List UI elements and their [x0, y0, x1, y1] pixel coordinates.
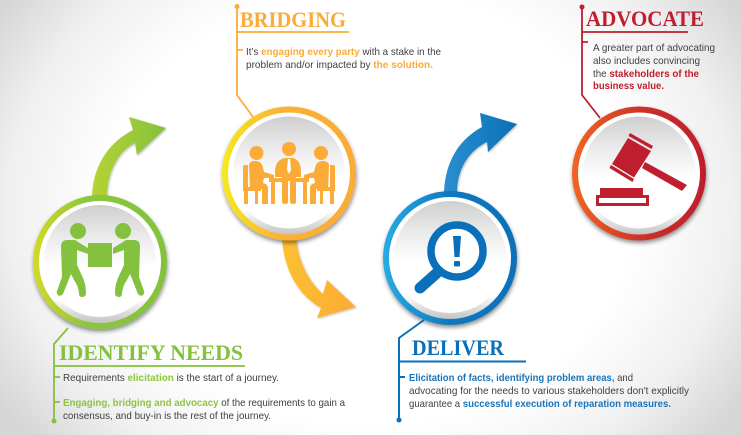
text block: bridging: problem and/or impacted by the solution.	[246, 59, 433, 71]
panel: advocate badge	[572, 106, 706, 240]
icon: people meeting at a table	[243, 142, 335, 204]
text block: deliver: advocating for the needs to various stakeholders don't explicitly	[409, 385, 690, 397]
panel: identify needs badge	[33, 195, 167, 329]
text block: advocate: A greater part of advocating	[593, 42, 715, 54]
arrow: green	[92, 117, 166, 197]
panel: bridging badge	[222, 106, 356, 240]
text block: identify needs	[63, 372, 345, 422]
text block: advocate	[593, 42, 715, 92]
text block: identify needs: Requirements elicitation is the start of a journey.	[63, 372, 279, 384]
text block: bridging	[246, 46, 441, 71]
text block: identify needs: consensus, and buy-in is the rest of the journey.	[63, 410, 271, 422]
arrow: blue	[444, 113, 517, 193]
panel: deliver badge	[383, 191, 517, 325]
text block: bridging: It’s engaging every party with a stake in the	[246, 46, 441, 58]
text block: deliver: guarantee a successful execution of reparation measures.	[409, 398, 671, 410]
icon: two people carrying a box	[57, 223, 144, 297]
text block: advocate: business value.	[593, 80, 664, 92]
heading: advocate: ADVOCATE	[586, 6, 704, 31]
callout: deliver	[396, 320, 690, 422]
heading: bridging: BRIDGING	[240, 7, 346, 32]
arrow: yellow	[282, 238, 356, 318]
text block: deliver	[409, 372, 690, 410]
callout: identify needs	[52, 328, 345, 424]
callout: bridging	[234, 4, 441, 117]
heading: identify needs: IDENTIFY NEEDS	[59, 340, 243, 365]
text block: identify needs: Engaging, bridging and advocacy of the requirements to gain a	[63, 397, 345, 409]
text block: deliver: Elicitation of facts, identifying problem areas, and	[409, 372, 633, 384]
text block: advocate: also includes convincing	[593, 55, 700, 67]
text block: advocate: the stakeholders of the	[593, 68, 699, 80]
callout: advocate	[580, 4, 715, 118]
icon: gavel	[596, 133, 687, 206]
heading: deliver: DELIVER	[412, 335, 505, 360]
icon: magnifying glass with exclamation	[420, 225, 483, 288]
